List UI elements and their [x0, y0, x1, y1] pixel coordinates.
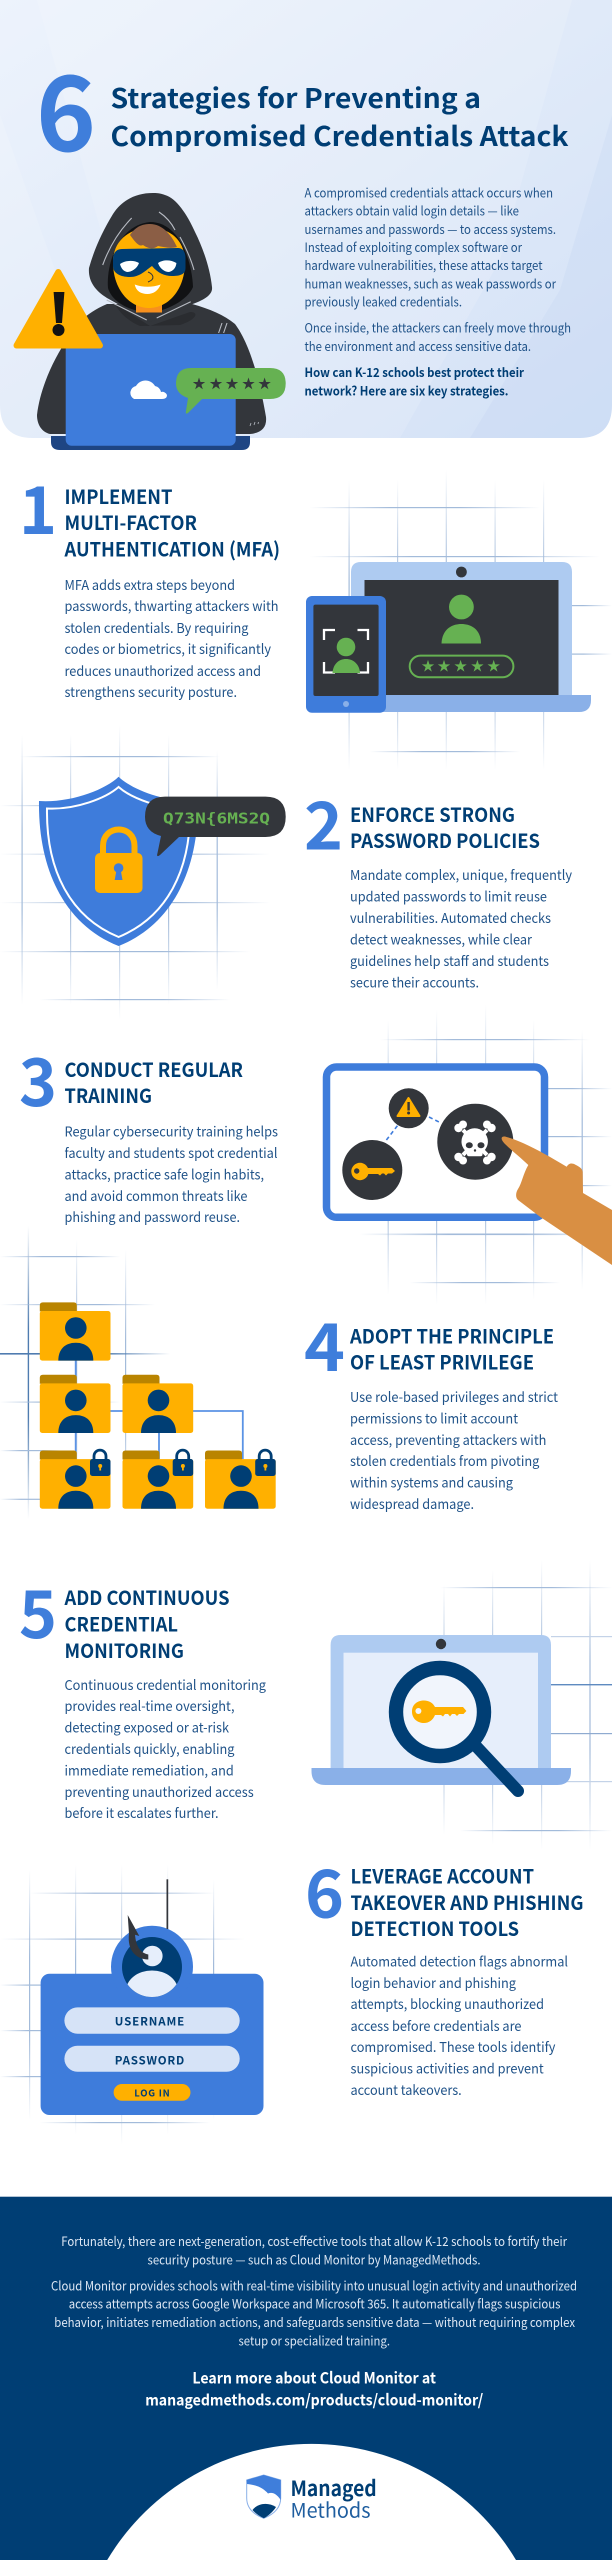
call to action link: Learn more about Cloud Monitor at: [192, 2366, 436, 2388]
heading 4: [349, 1320, 554, 1376]
body 4: permissions to limit account: [350, 1408, 518, 1428]
body 3: and avoid common threats like: [64, 1185, 248, 1205]
heading 6: TAKEOVER AND PHISHING: [350, 1887, 584, 1916]
body 6: suspicious activities and prevent: [350, 2058, 544, 2078]
body 2: updated passwords to limit reuse: [350, 886, 547, 906]
body 2: Mandate complex, unique, frequently: [350, 864, 572, 884]
icon: hooded hacker at laptop: [37, 193, 266, 450]
icon: warning triangle: [16, 272, 100, 346]
body 1: [64, 574, 278, 701]
body 4: [350, 1386, 558, 1513]
login field: username: [64, 2007, 240, 2034]
body 5: detecting exposed or at-risk: [64, 1717, 229, 1737]
heading 2: ENFORCE STRONG: [350, 799, 515, 828]
heading 5: CREDENTIAL: [64, 1609, 178, 1638]
body 2: secure their accounts.: [350, 972, 479, 992]
footer text: access attempts across Google Workspace and Microsoft 365. It automatically flags suspicious: [69, 2294, 561, 2313]
body 3: Regular cybersecurity training helps: [64, 1121, 278, 1141]
heading 2: PASSWORD POLICIES: [350, 825, 540, 854]
body 6: Automated detection flags abnormal: [350, 1950, 568, 1970]
grid pattern: section 4: [0, 1226, 170, 1519]
heading 3: CONDUCT REGULAR: [64, 1054, 243, 1083]
body 6: [350, 1950, 568, 2099]
intro text: network? Here are six key strategies.: [304, 380, 508, 399]
title: Compromised Credentials Attack: [110, 115, 569, 154]
intro text: How can K-12 schools best protect their: [304, 362, 524, 381]
body 2: detect weaknesses, while clear: [350, 929, 533, 949]
body 4: widespread damage.: [350, 1493, 474, 1513]
body 6: login behavior and phishing: [350, 1972, 516, 1992]
section 5: continuous monitoring: [19, 1562, 571, 1822]
number 3: 3: [19, 1030, 57, 1126]
login field: password: PASSWORD: [115, 2052, 184, 2068]
heading 5: MONITORING: [64, 1635, 184, 1664]
body 5: [64, 1674, 266, 1822]
call to action link: [145, 2366, 483, 2411]
icon: key node: [342, 1140, 402, 1200]
footer text: setup or specialized training.: [238, 2330, 390, 2349]
body 6: access before credentials are: [350, 2015, 522, 2035]
section 6: detection tools: [40, 1869, 582, 2115]
grid pattern: section 6: [0, 1865, 245, 2145]
body 2: vulnerabilities. Automated checks: [350, 907, 551, 927]
login field: username: USERNAME: [115, 2013, 184, 2029]
heading 1: IMPLEMENT: [64, 481, 172, 510]
grid pattern: section 3: [360, 1005, 612, 1305]
intro text: hardware vulnerabilities, these attacks target: [304, 255, 543, 274]
intro text: previously leaked credentials.: [304, 292, 462, 311]
section 1: multi-factor authentication: [19, 458, 591, 713]
illustration: phishing login card: [41, 1879, 263, 2115]
illustration: folder permission hierarchy: [40, 1302, 276, 1509]
body 5: Continuous credential monitoring: [64, 1674, 266, 1694]
callout: generated password: [145, 797, 286, 856]
intro text: A compromised credentials attack occurs when: [304, 182, 553, 202]
white arc behind logo: [107, 2444, 516, 2560]
number 6: 6: [305, 1842, 344, 1938]
body 4: Use role-based privileges and strict: [350, 1386, 558, 1406]
illustration: laptop with magnifier and key: [312, 1635, 571, 1791]
intro text: [304, 182, 571, 399]
footer text: security posture — such as Cloud Monitor by ManagedMethods.: [148, 2249, 480, 2268]
heading 4: ADOPT THE PRINCIPLE: [349, 1320, 554, 1349]
heading 6: DETECTION TOOLS: [350, 1913, 519, 1942]
logo: Managed Methods: Managed: [290, 2473, 377, 2503]
intro text: Once inside, the attackers can freely move through: [304, 318, 571, 337]
intro text: the environment and access sensitive data.: [304, 336, 531, 355]
heading 4: OF LEAST PRIVILEGE: [350, 1346, 534, 1376]
grid pattern: section 5: [440, 1560, 612, 1850]
intro text: attackers obtain valid login details — like: [304, 201, 519, 220]
body 5: immediate remediation, and: [64, 1760, 234, 1780]
body 4: stolen credentials from pivoting: [350, 1450, 540, 1470]
login button: [114, 2084, 190, 2101]
title: Strategies for Preventing a: [110, 77, 481, 116]
panel: footer call to action: [0, 2197, 612, 2560]
illustration: threat training screen: [326, 1067, 612, 1265]
body 3: attacks, practice safe login habits,: [64, 1164, 264, 1184]
number 1: 1: [19, 458, 57, 554]
icon: pointing hand: [502, 1136, 612, 1265]
login button: LOG IN: [134, 2086, 170, 2100]
body 6: account takeovers.: [350, 2079, 462, 2099]
body 4: access, preventing attackers with: [350, 1429, 546, 1449]
section 2: strong password policies: [39, 774, 572, 992]
heading 2: [350, 799, 540, 854]
heading 1: MULTI-FACTOR: [64, 507, 197, 536]
body 5: credentials quickly, enabling: [64, 1738, 235, 1758]
section 3: regular training: [19, 1030, 612, 1265]
grid pattern: section 1: [310, 470, 612, 770]
body 4: within systems and causing: [350, 1472, 513, 1492]
body 6: attempts, blocking unauthorized: [350, 1993, 544, 2013]
section 4: least privilege: [40, 1295, 558, 1513]
heading 1: [64, 481, 280, 562]
body 1: MFA adds extra steps beyond: [64, 574, 235, 594]
number 4: 4: [304, 1295, 345, 1391]
body 3: [64, 1121, 278, 1226]
body 1: codes or biometrics, it significantly: [64, 638, 271, 658]
logo: Managed Methods: [247, 2473, 377, 2524]
body 5: provides real-time oversight,: [64, 1695, 234, 1715]
body 3: phishing and password reuse.: [64, 1206, 240, 1226]
body 3: faculty and students spot credential: [64, 1142, 278, 1162]
title numeral: 6: [36, 30, 96, 181]
footer text: Fortunately, there are next-generation, cost-effective tools that allow K-12 schools to fortify their: [61, 2231, 567, 2250]
heading 1: AUTHENTICATION (MFA): [64, 534, 280, 562]
body 2: guidelines help staff and students: [350, 950, 549, 970]
panel: hero header: [0, 0, 612, 450]
heading 3: [64, 1054, 243, 1109]
number 5: 5: [19, 1562, 57, 1658]
icon: skull node: [437, 1104, 513, 1180]
illustration: shield with lock: [39, 777, 198, 946]
heading 6: [350, 1860, 584, 1942]
icon: key: [412, 1700, 466, 1723]
heading 6: LEVERAGE ACCOUNT: [350, 1860, 534, 1889]
body 1: reduces unauthorized access and: [64, 660, 261, 680]
body 5: before it escalates further.: [64, 1802, 218, 1822]
grid pattern: section 2: [0, 725, 270, 1020]
number 2: 2: [304, 774, 343, 870]
icon: phishing hook: [128, 1879, 168, 1960]
body 1: strengthens security posture.: [64, 681, 237, 701]
title: [110, 77, 569, 154]
illustration: laptop and tablet login: [306, 562, 591, 713]
heading 5: ADD CONTINUOUS: [64, 1582, 229, 1611]
body 1: stolen credentials. By requiring: [64, 617, 249, 637]
footer text: [51, 2231, 577, 2349]
logo: Managed Methods: Methods: [290, 2495, 370, 2524]
intro text: human weaknesses, such as weak passwords or: [304, 273, 556, 292]
login field: password: [64, 2046, 240, 2072]
intro text: Instead of exploiting complex software or: [304, 237, 522, 256]
body 2: [350, 864, 572, 992]
callout: generated password: Q73N{6MS2Q: [163, 810, 270, 828]
icon: password speech bubble: [176, 368, 286, 414]
call to action link: managedmethods.com/products/cloud-monitor/: [145, 2389, 483, 2411]
body 5: preventing unauthorized access: [64, 1781, 254, 1801]
body 6: compromised. These tools identify: [350, 2036, 555, 2056]
body 1: passwords, thwarting attackers with: [64, 595, 278, 615]
heading 3: TRAINING: [64, 1080, 152, 1109]
intro text: usernames and passwords — to access systems.: [304, 219, 556, 238]
heading 5: [64, 1582, 229, 1664]
icon: warning node: [389, 1088, 429, 1128]
